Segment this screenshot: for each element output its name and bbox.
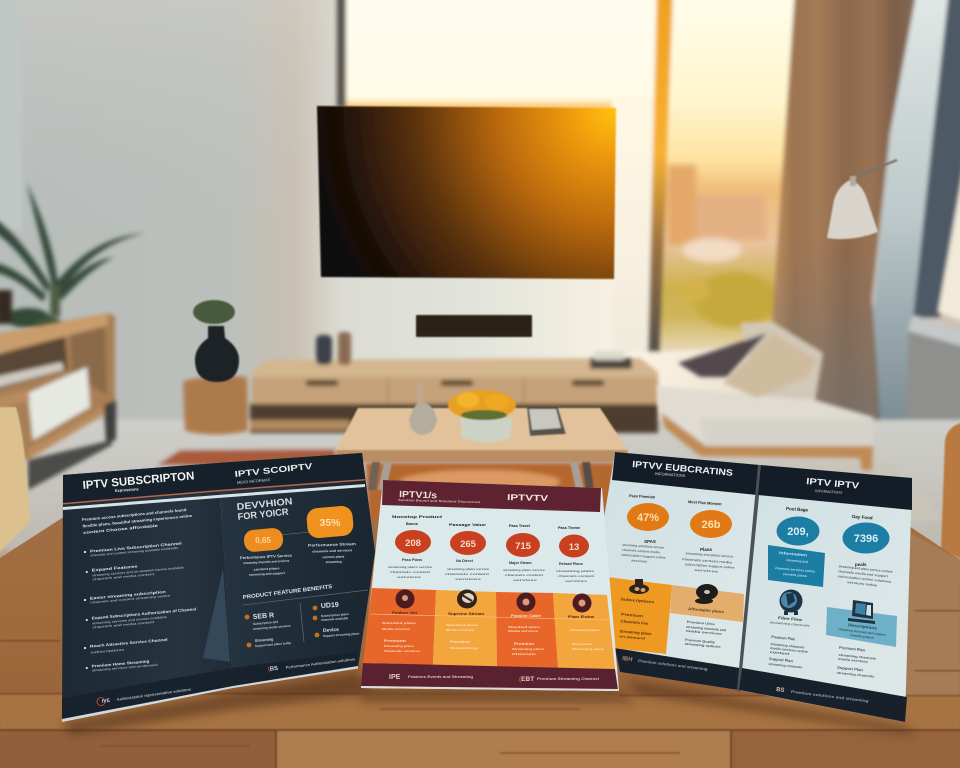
stat pill small bbox=[243, 527, 284, 553]
white stripe bbox=[63, 495, 218, 510]
orange column 3 bbox=[496, 592, 558, 668]
feature items right: Support streaming plans bbox=[323, 631, 360, 638]
column 1 stat: Bonus bbox=[406, 522, 418, 526]
window left pane bbox=[345, 0, 661, 110]
column 2 stat: Passage Value bbox=[449, 523, 486, 527]
sunlight beside the TV bbox=[612, 100, 656, 352]
column 1 stat: Nonstop Product bbox=[392, 515, 443, 519]
stat 1: Pass Premium bbox=[629, 494, 656, 499]
column captions: channels content bbox=[445, 572, 489, 576]
column body text: Streaming plans bbox=[572, 647, 604, 651]
stat 1 caption: services bbox=[631, 558, 648, 564]
stat 2 bbox=[842, 514, 890, 567]
room background bbox=[0, 0, 960, 550]
stat 1: 47% bbox=[637, 512, 659, 524]
column 3 stat: Pass Travel bbox=[509, 524, 530, 528]
light blue box: streaming channels and support bbox=[838, 627, 886, 637]
footer band bbox=[739, 668, 907, 722]
tan block bbox=[670, 585, 744, 622]
stat 2 bbox=[688, 500, 732, 552]
connector line bbox=[280, 532, 310, 535]
stat 2 caption: streaming and plans service bbox=[685, 551, 734, 559]
chair left bbox=[0, 407, 30, 556]
back wall bbox=[0, 0, 960, 460]
footer band bbox=[232, 652, 358, 687]
footer logo and text: (BS bbox=[268, 666, 279, 673]
column captions: channels content bbox=[558, 574, 594, 578]
subtitle: INFORMATIONS bbox=[815, 489, 843, 495]
column 2 stat: No Direct bbox=[456, 559, 474, 563]
light blue box: Descriptions bbox=[848, 623, 877, 631]
list right: media services bbox=[838, 657, 868, 664]
orange block text: Premium bbox=[621, 612, 644, 618]
stat 1 bbox=[776, 506, 820, 546]
footer band bbox=[361, 663, 618, 690]
blue callout box: Information bbox=[779, 551, 808, 558]
window sill bbox=[908, 315, 960, 347]
heading: DEVVHION bbox=[236, 496, 293, 513]
feature items right: UD19 bbox=[321, 602, 339, 610]
right page bbox=[218, 453, 375, 688]
footer band bbox=[62, 668, 233, 720]
feature list: Premium Live Subscription Channel bbox=[90, 542, 182, 554]
stat 1: Pool Bage bbox=[786, 506, 809, 513]
bottom white edge bbox=[62, 686, 233, 722]
footer logo and text bbox=[268, 656, 356, 673]
white stripe bbox=[218, 484, 365, 498]
list right bbox=[836, 646, 878, 679]
column labels bbox=[392, 611, 595, 619]
column 4 stat bbox=[558, 526, 589, 566]
footer logo and text: Authorization representative solutions bbox=[117, 687, 191, 702]
feature items: streaming media services bbox=[253, 624, 291, 631]
list right: streaming channels bbox=[838, 653, 877, 661]
orange stripe bbox=[218, 479, 365, 492]
header band bbox=[382, 480, 601, 512]
icon: globe bbox=[780, 590, 802, 615]
blurred city and trees bbox=[668, 165, 777, 328]
header band bbox=[612, 452, 760, 495]
feature items right: Subscription plans bbox=[321, 612, 349, 618]
feature list: Expand Features bbox=[91, 564, 138, 572]
stat 2: peals bbox=[855, 562, 867, 567]
feature list: channels and content streaming available worldwide bbox=[90, 546, 178, 558]
column 1 stat: 208 bbox=[405, 538, 421, 549]
subtitle: Expressions bbox=[115, 486, 140, 493]
column body text: Premium bbox=[384, 639, 407, 643]
TV console bbox=[250, 332, 658, 433]
column captions: services bbox=[455, 577, 482, 581]
list right: Premium Plan bbox=[839, 646, 866, 653]
left wall corner bbox=[0, 0, 22, 230]
brochure: light and blue bifold bbox=[602, 452, 912, 722]
icon: dark disc bbox=[695, 584, 718, 604]
column 2 stat bbox=[449, 523, 486, 563]
list left: Premium Plan bbox=[771, 635, 796, 642]
column captions: streaming plans service bbox=[503, 568, 545, 572]
stat pill large bbox=[306, 505, 354, 539]
icon caption bbox=[770, 615, 811, 628]
caption small pill: Performance IPTV Service bbox=[240, 554, 292, 560]
feature items: Subscription and bbox=[253, 620, 278, 626]
lower text: Premium Ultra bbox=[686, 620, 715, 626]
title: IPTV SCOIPTV bbox=[234, 461, 313, 479]
lower text: Premium Quality bbox=[685, 638, 715, 644]
amber column 4 bbox=[553, 593, 615, 669]
column captions: streaming plans bbox=[556, 569, 594, 573]
column captions: services bbox=[397, 575, 422, 579]
column captions: channels content bbox=[390, 570, 430, 574]
tan block text: Affordable plans bbox=[688, 607, 724, 614]
floor lamp bbox=[827, 160, 897, 239]
caption large pill: streaming bbox=[326, 560, 342, 564]
stat 2: 26b bbox=[702, 519, 721, 531]
column labels: Supreme Stream bbox=[448, 612, 485, 616]
left shelf unit bbox=[0, 313, 116, 490]
column labels: Passive Cable bbox=[511, 614, 541, 618]
heading bbox=[236, 496, 293, 523]
feature items right: channels available bbox=[321, 616, 349, 622]
header subtitle: Solution Bound and Standard Discovered bbox=[398, 498, 480, 504]
lower text: streaming channels and bbox=[686, 625, 726, 632]
column labels: Feature Set bbox=[392, 611, 418, 615]
column body text: Premium bbox=[514, 642, 535, 646]
wooden table bbox=[0, 518, 960, 768]
orange column 1 bbox=[363, 588, 436, 665]
column body text: Standard plans bbox=[446, 623, 478, 627]
feature items: Streaming bbox=[255, 637, 274, 643]
black vase with plant bbox=[193, 300, 239, 382]
list left: media services online bbox=[770, 646, 808, 654]
icon: dark devices bbox=[629, 579, 649, 594]
stat 2 caption bbox=[681, 551, 736, 575]
feature items: Support and plans today bbox=[255, 641, 291, 648]
intro text: content Choose affordable bbox=[83, 524, 158, 535]
list left: streaming channels bbox=[770, 642, 805, 650]
column captions bbox=[388, 565, 594, 583]
flower bowl bbox=[460, 418, 512, 442]
caption large pill: channels and services bbox=[312, 548, 353, 554]
feature items: SEB R bbox=[253, 612, 274, 621]
brochure: dark bifold bbox=[62, 453, 375, 722]
orange block text: Subscriptions bbox=[620, 597, 654, 604]
bottom white edge bbox=[233, 666, 358, 688]
blue callout box: streaming and bbox=[786, 558, 808, 564]
column body text: Standard plans bbox=[382, 621, 416, 625]
section heading: PRODUCT FEATURE BENEFITS bbox=[243, 584, 333, 601]
orange block text: Streaming plans bbox=[619, 629, 652, 636]
header title left: IPTV1/s bbox=[399, 489, 437, 500]
column 3 stat: Major Steam bbox=[509, 561, 532, 565]
feature items right bbox=[313, 602, 360, 638]
footer left text: Features Events and Streaming bbox=[408, 675, 474, 679]
stat pill large: 35% bbox=[319, 517, 341, 529]
chair right bbox=[941, 422, 960, 560]
title: IPTV IPTV bbox=[806, 476, 859, 491]
column 3 stat: 715 bbox=[515, 541, 532, 552]
feature list continued: Easier streaming subscription bbox=[90, 590, 167, 601]
stat 2 caption bbox=[837, 564, 893, 589]
column captions: streaming plans service bbox=[447, 567, 489, 571]
orange block text: Channels live bbox=[620, 619, 649, 626]
column 2 stat: 265 bbox=[460, 539, 477, 550]
sheer curtain bbox=[873, 0, 951, 445]
feature list end bbox=[84, 638, 170, 673]
feature list: streaming services and on-demand movies available bbox=[92, 565, 184, 577]
footer text: BS bbox=[776, 687, 785, 694]
header band bbox=[63, 463, 218, 503]
footer logo and text: IVE bbox=[102, 698, 111, 705]
feature list continued: channels and content streaming online bbox=[90, 594, 170, 605]
column 4 stat: Pass Theme bbox=[558, 526, 580, 530]
column 1 stat bbox=[392, 515, 443, 562]
blue callout box bbox=[768, 545, 825, 587]
column 3 stat bbox=[506, 524, 540, 565]
footer right text: (EBT bbox=[519, 676, 534, 683]
column body text: Streaming plans bbox=[384, 644, 414, 648]
fold line bbox=[737, 465, 762, 692]
list right: streaming channels bbox=[836, 671, 875, 679]
left page bbox=[602, 452, 760, 690]
header band bbox=[218, 453, 365, 490]
footer left text bbox=[389, 674, 474, 681]
stat 2 caption: services today bbox=[847, 580, 878, 587]
column 1 stat: Pass Plans bbox=[402, 558, 422, 562]
column body text: Streaming bbox=[450, 646, 478, 650]
books bbox=[527, 408, 566, 436]
title: IPTVV EUBCRATINS bbox=[632, 459, 733, 478]
window frame left bbox=[336, 0, 346, 108]
footer logo and text bbox=[96, 685, 192, 706]
list left: content bbox=[769, 650, 790, 656]
soundbar bbox=[416, 315, 532, 337]
feature list end: subscriptions bbox=[90, 648, 125, 655]
light blue box bbox=[826, 607, 897, 647]
window mullion bbox=[648, 0, 673, 352]
feature list continued bbox=[84, 587, 197, 630]
heading: FOR YOICR bbox=[237, 507, 289, 523]
stat 1 caption bbox=[621, 543, 667, 565]
footer left text: IPE bbox=[389, 674, 401, 681]
stat 2 caption: subscription online solutions bbox=[838, 574, 892, 584]
column body text: Streaming plans bbox=[512, 647, 544, 651]
right lower wall bbox=[905, 331, 960, 470]
icon 1 bbox=[396, 590, 414, 608]
page base bbox=[361, 480, 619, 691]
stat 2 caption: channels media and support bbox=[838, 569, 888, 578]
curtain bbox=[772, 0, 918, 445]
intro text: flexible plans, beautiful streaming experiences online bbox=[82, 514, 192, 528]
feature list bbox=[84, 542, 185, 582]
far right window frame bbox=[913, 0, 960, 318]
column body text: Media services bbox=[508, 629, 538, 633]
column captions: services bbox=[513, 578, 538, 582]
caption large pill: content plans bbox=[322, 554, 345, 559]
orange stripe bbox=[63, 490, 218, 504]
list right: Support Plan bbox=[837, 666, 864, 672]
stat 1 caption: channels content media bbox=[622, 548, 660, 554]
sofa bbox=[657, 322, 873, 470]
column 4 stat: Reload Plans bbox=[559, 562, 583, 566]
caption small pill: streaming and support bbox=[249, 571, 285, 577]
stat pill small: 0,65 bbox=[255, 536, 271, 545]
stat 2: Most Plan Moment bbox=[688, 500, 722, 506]
column body text bbox=[382, 621, 604, 656]
footer right text: Premium Streaming Channel bbox=[537, 677, 599, 681]
stat 2 caption: channels content media bbox=[682, 557, 732, 565]
stat 1: 209, bbox=[787, 526, 809, 538]
section divider bbox=[243, 590, 368, 605]
brochure shadows bbox=[62, 672, 915, 735]
feature list end: Reach Attractive Service Channel bbox=[90, 638, 168, 649]
stat 2: Plans bbox=[700, 547, 713, 552]
subtitle: INFORMATIONS bbox=[655, 471, 686, 478]
fold highlight bbox=[203, 568, 230, 662]
column body text: Channels services bbox=[384, 649, 420, 653]
floor bbox=[0, 420, 960, 550]
lower text: streaming options bbox=[685, 642, 721, 649]
orange block text bbox=[617, 597, 654, 641]
column body text: Standard plans bbox=[570, 628, 600, 632]
title: IPTV SUBSCRIPTON bbox=[82, 470, 195, 492]
feature list continued: Expand Subscriptions Authorization of Channel bbox=[91, 607, 196, 620]
lower text: media services bbox=[686, 629, 722, 636]
planks and grain bbox=[0, 530, 960, 768]
intro text: Premium access subscriptions and channels found bbox=[82, 508, 187, 522]
stat 2 caption: services bbox=[694, 568, 719, 574]
feature list: channels and media content bbox=[92, 572, 154, 581]
column body text: Channels bbox=[512, 652, 536, 656]
right page bbox=[737, 465, 912, 722]
feature list continued: channels and media content bbox=[92, 620, 154, 629]
header title right: IPTVTV bbox=[507, 492, 549, 503]
footer text bbox=[776, 687, 870, 704]
brochure: maroon and orange flyer bbox=[361, 480, 619, 691]
amber column 2 bbox=[433, 590, 497, 667]
wall mounted TV bbox=[317, 106, 616, 279]
window right pane with city bbox=[657, 0, 797, 352]
stat 1 caption: subscription support online bbox=[621, 553, 666, 560]
lower text bbox=[685, 620, 727, 649]
icon: laptop bbox=[848, 600, 875, 624]
intro text bbox=[82, 507, 193, 535]
stat 2 caption: subscription support online bbox=[685, 562, 735, 570]
feature items right: Device bbox=[323, 627, 339, 634]
lighter rule bbox=[370, 614, 609, 620]
icon 3 bbox=[516, 592, 536, 612]
subtitle: MEAS INFORMAS bbox=[237, 477, 271, 485]
left side plant bbox=[0, 183, 145, 333]
cream cushion bbox=[723, 333, 817, 398]
stat 1: SPAS bbox=[644, 539, 656, 544]
column labels: Plan Extra bbox=[568, 615, 595, 619]
column captions: channels content bbox=[505, 573, 543, 577]
column body text: Media services bbox=[382, 627, 410, 631]
list left: Support Plan bbox=[769, 657, 794, 663]
feature items bbox=[245, 612, 291, 648]
footer text: IBH bbox=[622, 656, 633, 663]
stat 2: Day Food bbox=[852, 514, 873, 520]
teapot bbox=[409, 400, 437, 435]
column body text: Premium bbox=[572, 642, 592, 646]
stat 1 caption: streaming and plans service bbox=[622, 543, 665, 550]
far right window pane bbox=[938, 160, 960, 322]
blue callout box: content plans bbox=[783, 572, 807, 578]
column 4 stat: 13 bbox=[569, 542, 579, 553]
caption large pill: Performance Stream bbox=[308, 542, 357, 548]
footer text: Premium solutions and streaming bbox=[638, 659, 708, 672]
column captions: streaming plans service bbox=[388, 565, 432, 569]
orange block bbox=[607, 577, 672, 654]
blue callout box: channels services online bbox=[775, 566, 815, 574]
caption small pill bbox=[240, 554, 293, 577]
icon caption: Fiber Flow bbox=[778, 616, 802, 622]
icon caption: streaming channels bbox=[770, 620, 810, 628]
footer right text bbox=[519, 676, 599, 683]
bottom white edge bbox=[361, 686, 619, 691]
list left: streaming channels bbox=[768, 662, 803, 669]
column body text: Media services bbox=[446, 628, 474, 632]
list left bbox=[768, 635, 810, 670]
stat 2: 7396 bbox=[854, 533, 878, 545]
icon 4 bbox=[572, 594, 592, 612]
coffee table bbox=[336, 381, 628, 490]
caption small pill: content plans bbox=[253, 566, 280, 572]
orange block text: on-demand bbox=[619, 634, 645, 641]
feature list end: streaming services and on-demand bbox=[92, 663, 158, 672]
footer logo and text: Performance Authorization solutions bbox=[286, 657, 355, 670]
feature list continued: streaming services and movies available bbox=[92, 615, 167, 625]
left page bbox=[62, 463, 233, 722]
feature list end: Premium Home Streaming bbox=[91, 659, 150, 668]
column captions: services bbox=[565, 579, 587, 583]
side stool bbox=[183, 376, 248, 434]
icon 2 bbox=[457, 590, 477, 608]
header band bbox=[758, 465, 912, 510]
caption small pill: streaming channels and services bbox=[243, 559, 290, 565]
stat 2 caption: streaming and plans service content bbox=[839, 564, 893, 574]
footer band bbox=[615, 648, 740, 690]
caption large pill bbox=[308, 542, 357, 565]
light blue box: media plans bbox=[850, 633, 875, 640]
dark cushion bbox=[678, 333, 767, 377]
column body text: Standard plans bbox=[508, 625, 540, 629]
stat 1 bbox=[627, 494, 669, 544]
footer text bbox=[622, 656, 709, 673]
rug bbox=[157, 449, 340, 470]
column body text: Premium bbox=[450, 640, 471, 644]
footer text: Premium solutions and streaming bbox=[791, 690, 870, 703]
